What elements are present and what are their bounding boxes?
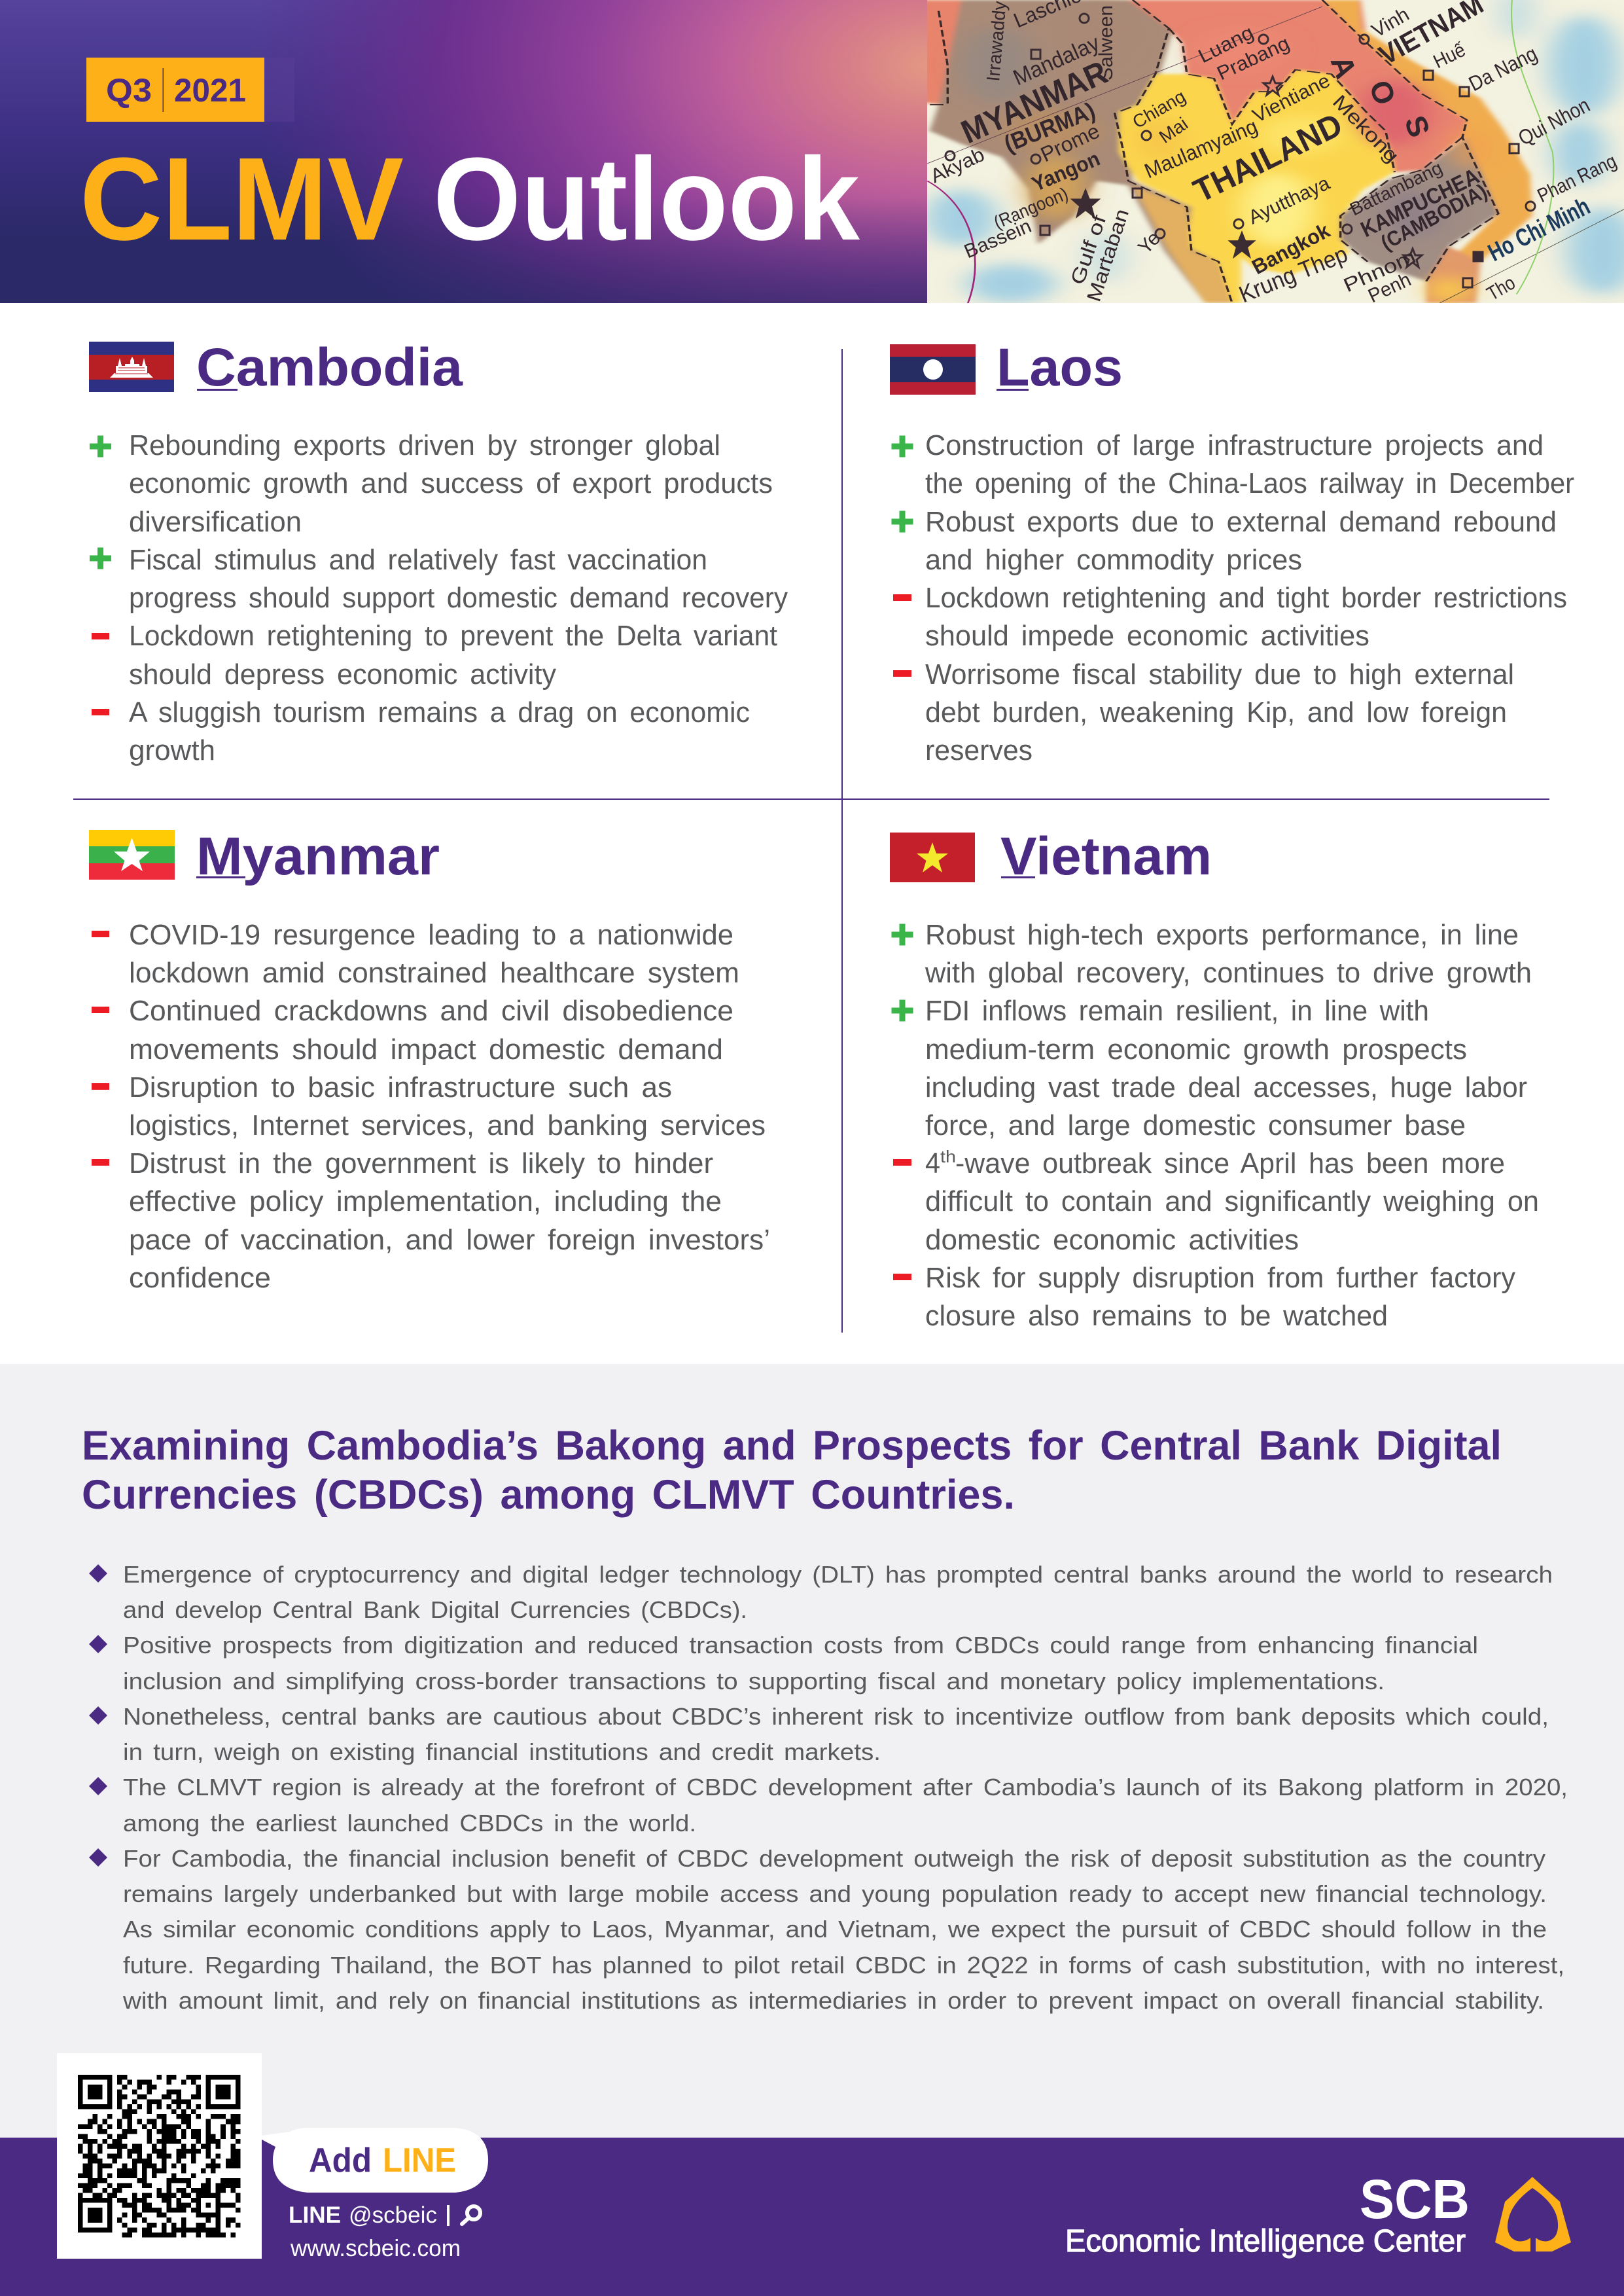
- panel: Laos: [890, 338, 1574, 766]
- text block: CBDC bullets: remains largely underbanked but with large mobile access and young population ready to accept new financial technology.: [123, 1880, 1547, 1907]
- map place labels: Phnom: [1340, 246, 1419, 296]
- map place labels: (Rangoon): [991, 183, 1071, 233]
- map place labels: MYANMAR: [956, 54, 1113, 151]
- map place labels: Chiang: [1129, 86, 1189, 132]
- badge: Q3 2021: Q3: [106, 72, 152, 109]
- text block: CBDC bullets: Emergence of cryptocurrency and digital ledger technology (DLT) has prompted central banks around the world to research: [123, 1561, 1553, 1588]
- heading: Cambodia: Cambodia: [196, 338, 463, 397]
- icon: Cambodia flag: [89, 342, 174, 392]
- text block: Vietnam bullets: including vast trade deal accesses, huge labor: [925, 1071, 1527, 1103]
- text block: Vietnam bullets: [925, 919, 1539, 1332]
- text block: Laos bullets: Lockdown retightening and tight border restrictions: [925, 582, 1567, 614]
- icon: Laos flag: [890, 344, 976, 395]
- map place labels: Tho: [1483, 272, 1519, 305]
- text block: Vietnam bullets: medium-term economic growth prospects: [925, 1033, 1467, 1066]
- callout: Add LINE speech bubble: LINE: [383, 2142, 456, 2179]
- text block: CBDC bullets: Nonetheless, central banks are cautious about CBDC’s inherent risk to incentivize outflow from bank deposits which could,: [123, 1703, 1549, 1730]
- map place labels: Irrawaddy: [983, 0, 1010, 82]
- map place labels: Maulamyaing: [1141, 114, 1261, 183]
- text block: Myanmar bullets: Continued crackdowns and civil disobedience: [129, 995, 733, 1027]
- map place labels: Bassein: [961, 215, 1034, 262]
- icon: SCB logo: [1495, 2177, 1571, 2251]
- map place labels: S: [1398, 111, 1437, 141]
- text block: Vietnam bullets: with global recovery, continues to drive growth: [925, 957, 1532, 989]
- text block: Cambodia bullets: should depress economic activity: [129, 658, 556, 691]
- text block: Cambodia bullets: Fiscal stimulus and relatively fast vaccination: [129, 544, 707, 576]
- panel: CBDC section background: [0, 1364, 1624, 2138]
- text block: CBDC bullets: future. Regarding Thailand, the BOT has planned to pilot retail CBDC in 2Q22 in forms of cash substitution, with no interest,: [123, 1952, 1564, 1979]
- text block: LINE handle: @scbeic: [349, 2202, 437, 2228]
- map place labels: Yangon: [1029, 147, 1103, 196]
- text block: Myanmar bullets: logistics, Internet services, and banking services: [129, 1109, 766, 1141]
- map place labels: Krung Thep: [1235, 240, 1351, 308]
- text block: Cambodia bullets: Lockdown retightening to prevent the Delta variant: [129, 620, 777, 652]
- heading: Myanmar: Myanmar: [196, 827, 440, 886]
- bullet markers: [92, 931, 109, 1166]
- map place labels: Penh: [1365, 269, 1415, 307]
- map place labels: Vientiane: [1249, 70, 1333, 127]
- bullet markers: diamonds: [89, 1564, 107, 1867]
- icon: Myanmar flag: [89, 830, 175, 880]
- map place labels: Salween: [1095, 5, 1117, 81]
- map place labels: (BURMA): [1000, 97, 1099, 157]
- map place labels: Luang: [1195, 22, 1257, 67]
- QR code card: [57, 2053, 262, 2259]
- text block: Myanmar bullets: Disruption to basic infrastructure such as: [129, 1071, 672, 1103]
- callout: Add LINE speech bubble: Add: [309, 2142, 372, 2179]
- map place labels: A: [1324, 51, 1364, 83]
- text block: Vietnam bullets: force, and large domestic consumer base: [925, 1109, 1466, 1141]
- text block: CBDC bullets: in turn, weigh on existing financial institutions and credit markets.: [123, 1738, 881, 1765]
- text block: Vietnam bullets: 4: [925, 1147, 940, 1179]
- heading: CBDC article: Currencies (CBDCs) among CLMVT Countries.: [82, 1472, 1015, 1518]
- map place labels: Gulf of: [1067, 212, 1111, 287]
- text block: Myanmar bullets: lockdown amid constrained healthcare system: [129, 957, 739, 989]
- map place labels: [927, 0, 1620, 308]
- callout: Add LINE speech bubble: [262, 2128, 488, 2193]
- map place labels: Prabang: [1214, 33, 1293, 84]
- map place labels: Ye: [1134, 227, 1165, 259]
- title: Outlook: [433, 134, 860, 265]
- text block: Vietnam bullets: closure also remains to be watched: [925, 1300, 1388, 1332]
- map place labels: THAILAND: [1188, 106, 1348, 209]
- text block: Laos bullets: debt burden, weakening Kip, and low foreign: [925, 696, 1507, 728]
- text block: Myanmar bullets: pace of vaccination, and lower foreign investors’: [129, 1224, 770, 1256]
- text block: Myanmar bullets: [129, 919, 770, 1294]
- text block: Vietnam bullets: domestic economic activities: [925, 1224, 1299, 1256]
- text block: Laos bullets: Construction of large infrastructure projects and: [925, 429, 1544, 461]
- badge: Q3 2021: [86, 58, 294, 122]
- logo text: SCB Economic Intelligence Center: [1065, 2168, 1470, 2259]
- text block: CBDC bullets: and develop Central Bank Digital Currencies (CBDCs).: [123, 1596, 747, 1623]
- text block: Cambodia bullets: [129, 429, 788, 766]
- footer band: [0, 2138, 1624, 2296]
- text block: Cambodia bullets: progress should support domestic demand recovery: [129, 582, 788, 614]
- text block: CBDC bullets: As similar economic conditions apply to Laos, Myanmar, and Vietnam, we expect the pursuit of CBDC should follow in the: [123, 1916, 1547, 1943]
- title: [80, 134, 860, 265]
- text block: Vietnam bullets: -wave outbreak since April has been more: [955, 1147, 1505, 1179]
- text block: Cambodia bullets: diversification: [129, 506, 302, 538]
- logo text: SCB Economic Intelligence Center: SCB: [1360, 2168, 1470, 2230]
- text block: LINE handle: LINE: [289, 2202, 341, 2228]
- map place labels: (CAMBODIA): [1377, 179, 1491, 255]
- text block: website: www.scbeic.com: [290, 2234, 461, 2261]
- text block: Laos bullets: reserves: [925, 734, 1033, 766]
- text block: Myanmar bullets: Distrust in the government is likely to hinder: [129, 1147, 713, 1179]
- text block: Cambodia bullets: A sluggish tourism remains a drag on economic: [129, 696, 750, 728]
- text block: CBDC bullets: The CLMVT region is already at the forefront of CBDC development after Cambodia’s launch of its Bakong platform in 2020,: [123, 1774, 1568, 1801]
- text block: Cambodia bullets: Rebounding exports driven by stronger global: [129, 429, 720, 461]
- text block: Laos bullets: Robust exports due to external demand rebound: [925, 506, 1557, 538]
- text block: CBDC bullets: with amount limit, and rely on financial institutions as intermediaries in order to prevent impact on overall financial stability.: [122, 1987, 1544, 2014]
- text block: Vietnam bullets: Risk for supply disruption from further factory: [925, 1262, 1515, 1294]
- map place labels: Bangkok: [1248, 219, 1333, 279]
- heading: Vietnam: Vietnam: [1000, 827, 1212, 886]
- text block: Myanmar bullets: COVID-19 resurgence leading to a nationwide: [129, 919, 733, 951]
- map place labels: Martaban: [1083, 206, 1133, 304]
- map place labels: Ayutthaya: [1245, 172, 1333, 228]
- text block: Laos bullets: Worrisome fiscal stability due to high external: [925, 658, 1514, 691]
- text block: CBDC bullets: Positive prospects from digitization and reduced transaction costs from CBDCs could range from enhancing financial: [123, 1632, 1478, 1659]
- text block: Vietnam bullets: th: [940, 1147, 956, 1166]
- map photo of mainland Southeast Asia: [916, 0, 1624, 308]
- logo text: SCB Economic Intelligence Center: Economic Intelligence Center: [1065, 2224, 1466, 2259]
- bullet markers: [90, 436, 111, 715]
- map place labels: Ho Chi Minh: [1484, 192, 1595, 267]
- map place labels: Prome: [1037, 119, 1103, 166]
- map place labels: Mekong: [1328, 91, 1403, 167]
- text block: CBDC bullets: For Cambodia, the financial inclusion benefit of CBDC development outweigh the risk of deposit substitution as the country: [123, 1845, 1545, 1872]
- panel: Myanmar: [89, 827, 770, 1294]
- text block: Laos bullets: the opening of the China-Laos railway in December: [925, 467, 1574, 499]
- bullet markers: [891, 924, 913, 1280]
- map place labels: Akyab: [927, 144, 988, 187]
- text block: Vietnam bullets: Robust high-tech exports performance, in line: [925, 919, 1519, 951]
- heading: CBDC article: [82, 1423, 1502, 1518]
- map place labels: Battambang: [1347, 157, 1445, 219]
- text block: Myanmar bullets: effective policy implementation, including the: [129, 1185, 722, 1217]
- text block: CBDC bullets: inclusion and simplifying cross-border transactions to supporting fiscal and monetary policy implementations.: [123, 1668, 1385, 1695]
- heading: CBDC article: Examining Cambodia’s Bakong and Prospects for Central Bank Digital: [82, 1423, 1502, 1469]
- map place labels: Qui Nhon: [1514, 93, 1593, 150]
- heading: Laos: Laos: [997, 338, 1123, 397]
- map place labels: Vinh: [1368, 3, 1413, 42]
- header banner: [0, 0, 929, 303]
- text block: Laos bullets: should impede economic activities: [925, 620, 1369, 652]
- text block: Laos bullets: and higher commodity prices: [925, 544, 1302, 576]
- panel: Vietnam: [890, 827, 1539, 1332]
- map place labels: Mai: [1156, 113, 1192, 147]
- panel: Cambodia: [89, 338, 788, 766]
- text block: Vietnam bullets: FDI inflows remain resilient, in line with: [925, 995, 1429, 1027]
- icon: magnifier: [462, 2206, 480, 2224]
- text block: CBDC bullets: [122, 1561, 1568, 2014]
- map place labels: KAMPUCHEA: [1357, 164, 1483, 242]
- text block: CBDC bullets: among the earliest launched CBDCs in the world.: [123, 1810, 696, 1837]
- title: CLMV: [80, 134, 404, 265]
- icon: Vietnam flag: [890, 833, 975, 882]
- text block: Cambodia bullets: growth: [129, 734, 215, 766]
- map place labels: Mandalay: [1010, 31, 1103, 90]
- text block: Cambodia bullets: economic growth and success of export products: [129, 467, 773, 499]
- text block: Laos bullets: [925, 429, 1574, 766]
- badge: Q3 2021: 2021: [174, 72, 246, 109]
- text block: LINE handle: [289, 2202, 450, 2228]
- map city markers: [945, 14, 1535, 287]
- map place labels: Huế: [1430, 39, 1469, 73]
- map place labels: O: [1363, 76, 1403, 109]
- map place labels: Da Nang: [1465, 41, 1541, 96]
- text block: Myanmar bullets: confidence: [129, 1262, 271, 1294]
- soft terrain colour variation: [961, 0, 1494, 303]
- bullet markers: [891, 436, 913, 677]
- text block: Vietnam bullets: difficult to contain and significantly weighing on: [925, 1185, 1539, 1217]
- text block: Myanmar bullets: movements should impact domestic demand: [129, 1033, 723, 1066]
